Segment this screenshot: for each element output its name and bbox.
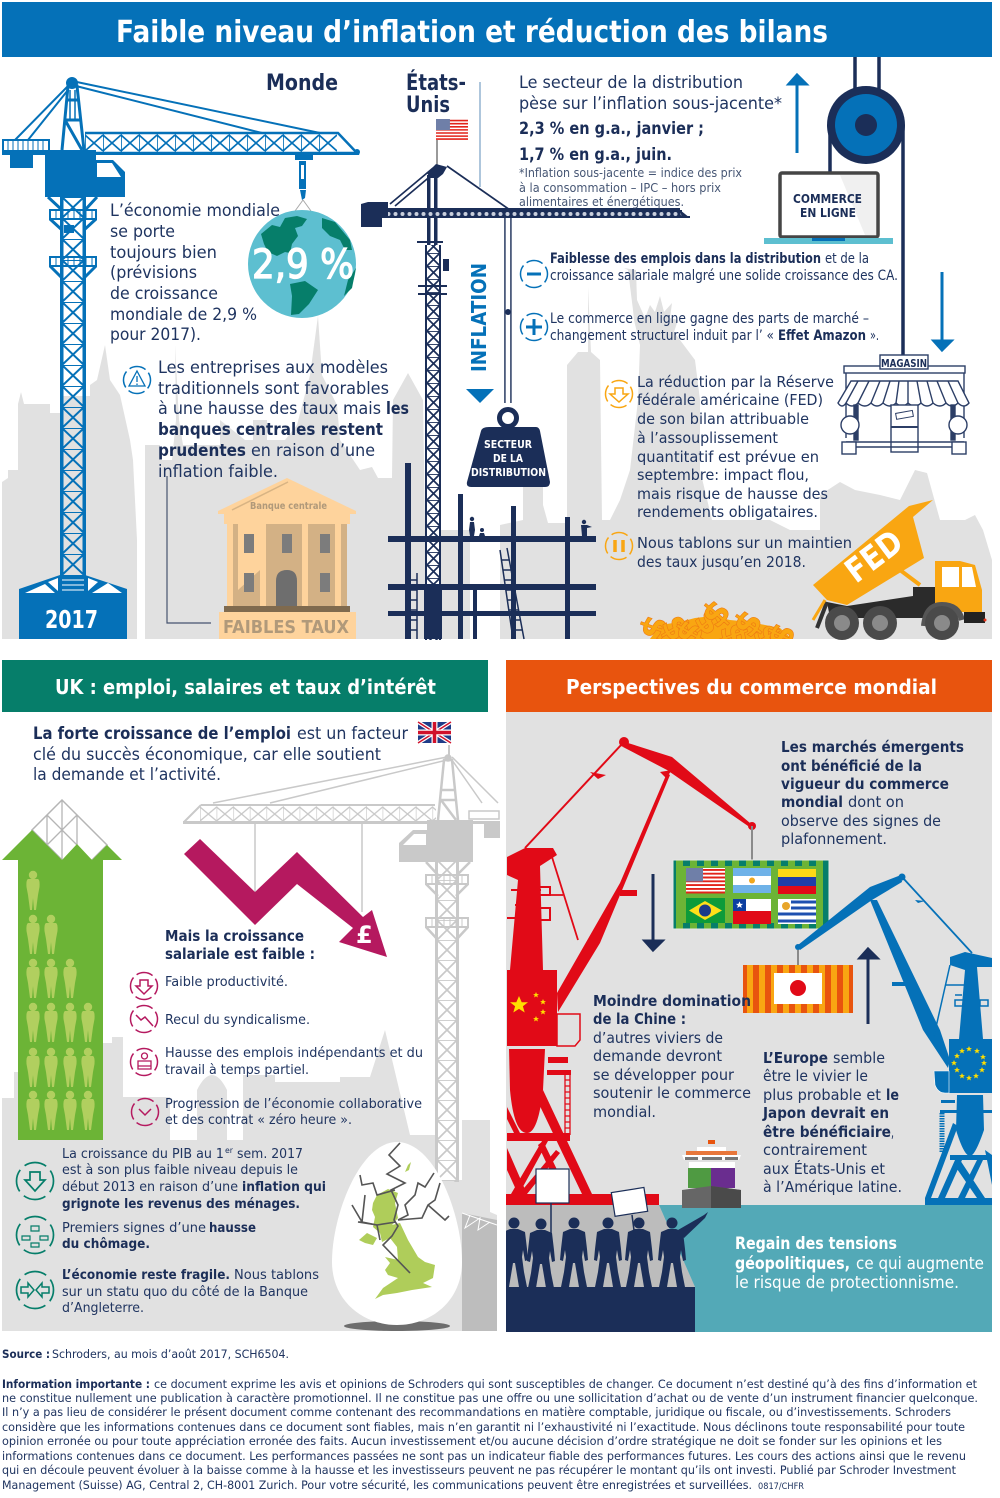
icon: dollar pile: $ bbox=[632, 610, 678, 646]
text: world economy: toujours bien bbox=[110, 243, 217, 263]
text: Europe and Japan: le bbox=[886, 1086, 899, 1104]
text: emerging markets bbox=[781, 738, 964, 848]
text: Europe and Japan: être bénéficiaire bbox=[763, 1123, 891, 1141]
list: UK outlook: est à son plus faible niveau depuis le bbox=[62, 1162, 298, 1178]
flag: Brazil bbox=[686, 898, 725, 923]
text: strong job growth: est un facteur bbox=[297, 724, 408, 744]
arrow: falling wages with pound bbox=[184, 839, 387, 957]
legal information: ce document exprime les avis et opinions de Schroders qui sont susceptibles de changer. Ce document n’est destiné qu’à des fins d’information et bbox=[154, 1377, 977, 1391]
list: UK outlook: Premiers signes d’une bbox=[62, 1220, 206, 1236]
crane hook bbox=[295, 155, 313, 211]
icon: dollar pile: $ bbox=[693, 592, 739, 636]
legal information: 0817/CHFR bbox=[758, 1482, 805, 1492]
icon: store magasin bbox=[838, 355, 969, 454]
icon: dollar pile: $ bbox=[686, 600, 731, 643]
list: UK outlook: sem. 2017 bbox=[237, 1146, 303, 1162]
list: UK outlook: hausse bbox=[209, 1220, 256, 1236]
crane tower bbox=[507, 848, 580, 1133]
text: Europe and Japan: Japon devrait en bbox=[762, 1104, 889, 1122]
text: Europe and Japan: L’Europe bbox=[763, 1049, 828, 1067]
text: FED balance sheet: de son bilan attribuable bbox=[637, 410, 809, 428]
flag pole bbox=[436, 140, 438, 166]
panel: geopolitical tensions: Regain des tensions bbox=[735, 1234, 897, 1253]
list: UK outlook: sur un statu quo du côté de la Banque bbox=[62, 1284, 308, 1300]
crane tower bbox=[426, 862, 470, 1182]
arrow: online commerce up bbox=[789, 75, 806, 153]
text: wage growth heading bbox=[165, 927, 315, 963]
title band: Faible niveau d’inflation et réduction des bilans bbox=[116, 15, 828, 50]
text: FED balance sheet bbox=[637, 373, 834, 521]
text: emerging markets: vigueur du commerce bbox=[781, 775, 949, 793]
text: China: soutenir le commerce bbox=[593, 1084, 751, 1102]
crane counterweight bbox=[361, 202, 388, 227]
legal information: considère que les informations contenues dans ce document sont fiables, mais n’en garantit ni l’exhaustivité ni l’exactitude. Nous déclinons toute responsabilité pour toute bbox=[2, 1420, 965, 1434]
text: FED balance sheet: mais risque de hausse des bbox=[637, 485, 828, 503]
source: Source : bbox=[2, 1347, 50, 1361]
text: FED balance sheet: septembre: impact flou, bbox=[637, 466, 809, 484]
text: wage growth heading: Mais la croissance bbox=[165, 927, 304, 945]
icon: US flag bbox=[436, 119, 468, 140]
list: wage growth factors: Recul du syndicalisme. bbox=[165, 1012, 310, 1028]
text: Europe and Japan: semble bbox=[833, 1049, 885, 1067]
legal information: informations contenues dans ce document. Les performances passées ne sont pas un indicateur fiable des performances futures. Les cours des actions ainsi que le revenu bbox=[2, 1449, 966, 1463]
arrow: store down bbox=[934, 272, 951, 350]
text: emerging markets: plafonnement. bbox=[781, 830, 887, 848]
divider bbox=[479, 82, 481, 187]
icon: dollar pile: $ bbox=[711, 617, 756, 653]
connector line to bank bbox=[167, 476, 211, 623]
legal information: qui en découle peuvent évoluer à la baisse comme à la hausse et les investisseurs peuvent ne pas récupérer le montant qu’ils ont investi. Publié par Schroder Investment bbox=[2, 1463, 956, 1477]
icon: central bank bbox=[218, 478, 356, 639]
list: UK outlook: Nous tablons bbox=[234, 1267, 319, 1283]
list: wage growth factors bbox=[130, 972, 423, 1128]
text: world economy bbox=[110, 201, 280, 345]
text: Europe and Japan: plus probable et bbox=[763, 1086, 881, 1104]
arrow: Japan up bbox=[860, 949, 877, 1024]
egg cracks bbox=[352, 1143, 449, 1273]
icon: dollar pile: $ bbox=[725, 603, 771, 645]
list: UK outlook: d’Angleterre. bbox=[62, 1300, 144, 1316]
crane hanging lines bbox=[255, 823, 362, 912]
crane base 2017 bbox=[19, 575, 127, 639]
list: UK outlook: er bbox=[225, 1146, 234, 1155]
truck chassis bbox=[813, 570, 945, 628]
text: central banks: prudentes bbox=[158, 441, 246, 461]
text: China: se développer pour bbox=[593, 1066, 735, 1084]
crane mast bbox=[417, 164, 449, 640]
text: FED balance sheet: fédérale américaine (FED) bbox=[637, 391, 823, 409]
crane boom bbox=[795, 874, 972, 1068]
weight: secteur de la distribution: DISTRIBUTION bbox=[471, 467, 546, 479]
icon: laptop commerce en ligne: EN LIGNE bbox=[800, 206, 856, 220]
icon: minus bbox=[520, 260, 548, 288]
icon: Japan container bbox=[743, 950, 853, 1013]
icon: pause orange bbox=[606, 532, 632, 560]
legal information: Management (Suisse) AG, Central 2, CH-8001 Zurich. Pour votre sécurité, les communications peuvent être enregistrées et surveillées. bbox=[2, 1478, 752, 1492]
text: FED balance sheet: La réduction par la Réserve bbox=[637, 373, 834, 391]
text: retail sector inflation: 1,7 % en g.a., juin. bbox=[519, 145, 672, 165]
text: retail sector inflation: Le secteur de la distribution bbox=[519, 73, 743, 93]
arrow: falling wages with pound: £ bbox=[356, 921, 373, 949]
crane cabin bbox=[399, 811, 500, 862]
text: Europe and Japan: à l’Amérique latine. bbox=[763, 1178, 902, 1196]
icon: cargo ship bbox=[682, 1140, 741, 1208]
text: world economy: se porte bbox=[110, 222, 175, 242]
legal information: ne constitue nullement une publication à caractère promotionnel. Il ne constitue pas une offre ou une sollicitation d’achat ou de vente d’un instrument financier quelconque. bbox=[2, 1391, 978, 1405]
text: emerging markets: dont on bbox=[848, 793, 904, 811]
icon: protesters with placards bbox=[500, 1169, 708, 1288]
icon: dollar pile: $ bbox=[744, 617, 790, 657]
legal information bbox=[2, 1377, 978, 1492]
weight: secteur de la distribution: SECTEUR bbox=[484, 439, 532, 451]
text: rates on hold: Nous tablons sur un maintien bbox=[637, 534, 852, 552]
text: emerging markets: Les marchés émergents bbox=[781, 738, 964, 756]
list: UK outlook: grignote les revenus des ménages. bbox=[62, 1196, 300, 1212]
text: Amazon effect: ». bbox=[870, 328, 879, 344]
list: wage growth factors: Progression de l’économie collaborative bbox=[165, 1096, 422, 1112]
panel: world and US skyline background bbox=[2, 268, 992, 639]
header: UK bbox=[2, 660, 488, 712]
crane cables bbox=[390, 166, 510, 210]
header: commerce mondial bbox=[506, 660, 992, 712]
UK map bbox=[359, 1162, 435, 1299]
scaffolding bbox=[388, 463, 596, 639]
icon: zero hour contracts bbox=[132, 1098, 158, 1126]
crane mast and cables bbox=[15, 78, 320, 150]
icon: plus bbox=[520, 314, 548, 340]
text: wage growth heading: salariale est faible : bbox=[165, 945, 315, 963]
source: Schroders, au mois d’août 2017, SCH6504. bbox=[52, 1347, 289, 1361]
text: world economy: de croissance bbox=[110, 284, 218, 304]
text: Amazon effect: changement structurel induit par l’ « bbox=[550, 328, 774, 344]
flag: Chile bbox=[733, 899, 771, 924]
panel: US crane bbox=[361, 140, 690, 640]
header: commerce mondial: Perspectives du commerce mondial bbox=[566, 675, 937, 699]
crane boom bbox=[525, 737, 756, 1012]
text: strong job growth: clé du succès économique, car elle soutient bbox=[33, 745, 381, 765]
text: China bbox=[593, 992, 751, 1121]
text: retail sector inflation: à la consommation – IPC – hors prix bbox=[519, 181, 721, 195]
text: central banks: banques centrales restent bbox=[158, 420, 383, 440]
icon: globe 2,9 % bbox=[248, 210, 356, 318]
text: China: de la Chine : bbox=[593, 1010, 686, 1028]
arrow: emerging markets down bbox=[645, 874, 662, 950]
list: UK outlook: L’économie reste fragile. bbox=[62, 1267, 230, 1283]
heading: États-Unis bbox=[406, 70, 466, 118]
text: strong job growth: la demande et l’activité. bbox=[33, 765, 221, 785]
text: strong job growth bbox=[33, 724, 408, 785]
text: rates on hold: des taux jusqu’en 2018. bbox=[637, 553, 806, 571]
icon: central bank: Banque centrale bbox=[250, 501, 327, 512]
text: emerging markets: ont bénéficié de la bbox=[781, 757, 922, 775]
crane jib bbox=[2, 133, 360, 155]
text: FED balance sheet: à l’assouplissement bbox=[637, 429, 778, 447]
icon: red crane China bbox=[506, 737, 756, 1205]
crane mast and cables bbox=[213, 745, 498, 820]
icon: low productivity bbox=[130, 972, 158, 1000]
text: Europe and Japan: aux États-Unis et bbox=[763, 1159, 885, 1178]
crane legs and base bbox=[925, 1100, 992, 1205]
arrow: green employment arrow with people bbox=[2, 800, 122, 1140]
flag: Venezuela bbox=[778, 869, 816, 894]
legal information: Information importante : bbox=[2, 1377, 150, 1391]
text: retail sector inflation: 2,3 % en g.a., janvier ; bbox=[519, 119, 704, 139]
text: emerging markets: observe des signes de bbox=[781, 812, 941, 830]
text: Amazon effect: Effet Amazon bbox=[778, 328, 866, 344]
icon: laptop commerce en ligne: COMMERCE bbox=[793, 192, 862, 206]
icon: FED dump truck bbox=[813, 500, 986, 640]
icon: warning bbox=[124, 366, 150, 394]
icon: globe 2,9 %: 2,9 % bbox=[252, 242, 354, 288]
crane legs and base bbox=[506, 1057, 659, 1205]
text: retail jobs: et de la bbox=[825, 251, 869, 267]
crane counterweight bbox=[3, 140, 49, 168]
crane jib bbox=[183, 805, 500, 824]
list: wage growth factors: Faible productivité. bbox=[165, 974, 288, 990]
text: China: Moindre domination bbox=[593, 992, 751, 1010]
text: strong job growth: La forte croissance de l’emploi bbox=[33, 724, 291, 744]
crane base bbox=[462, 1213, 497, 1331]
text: central banks: à une hausse des taux mais bbox=[158, 399, 381, 419]
icon: FED dump truck: FED bbox=[837, 522, 910, 590]
panel: geopolitical tensions: le risque de protectionnisme. bbox=[735, 1273, 959, 1292]
icon: UK flag bbox=[418, 722, 451, 743]
flag: USA bbox=[686, 868, 725, 893]
heading: Monde: Monde bbox=[266, 71, 338, 96]
text: retail jobs: croissance salariale malgré une solide croissance des CA. bbox=[550, 268, 898, 284]
text: Europe and Japan: être le vivier le bbox=[763, 1067, 868, 1085]
hoist ropes bbox=[504, 218, 512, 403]
text: China: demande devront bbox=[593, 1047, 722, 1065]
text: retail sector inflation: alimentaires et énergétiques. bbox=[519, 195, 684, 209]
icon: down arrow orange bbox=[606, 380, 632, 408]
text: Amazon effect bbox=[550, 311, 879, 344]
list: UK outlook: début 2013 en raison d’une bbox=[62, 1179, 238, 1195]
icon: unemployment bbox=[16, 1216, 54, 1254]
icon: EU stars bbox=[951, 1046, 987, 1080]
text: world economy: pour 2017). bbox=[110, 325, 201, 345]
text: central banks: traditionnels sont favorables bbox=[158, 379, 389, 399]
weight: secteur de la distribution: DE LA bbox=[493, 453, 524, 465]
icon: dollar pile bbox=[640, 601, 794, 639]
text: central banks bbox=[158, 358, 409, 482]
flag: Uruguay bbox=[778, 899, 816, 924]
panel: geopolitical tensions: géopolitiques, bbox=[735, 1254, 850, 1273]
icon: dollar pile: $ bbox=[667, 613, 713, 653]
text: rates on hold bbox=[637, 534, 852, 571]
icon: store magasin: MAGASIN bbox=[881, 358, 927, 370]
icon: laptop commerce en ligne bbox=[764, 173, 893, 244]
icon: central bank: FAIBLES TAUX bbox=[223, 617, 349, 638]
icon: container of emerging market flags bbox=[673, 826, 829, 929]
icon: China flag stars bbox=[510, 992, 546, 1022]
list: wage growth factors: et des contrat « zéro heure ». bbox=[165, 1112, 352, 1128]
text: retail jobs: Faiblesse des emplois dans la distribution bbox=[550, 251, 821, 267]
list: UK outlook: La croissance du PIB au 1 bbox=[62, 1146, 224, 1162]
legal information: opinion erronée ou pour toute appréciation erronée des faits. Aucun investissement et/ou aucune décision d’ordre stratégique ne doit se fonder sur les opinions et les bbox=[2, 1434, 942, 1448]
text: central banks: les bbox=[386, 399, 409, 419]
truck dump body bbox=[813, 500, 933, 605]
heading: États-Unis: États- bbox=[406, 70, 466, 96]
crane cabin bbox=[45, 150, 125, 197]
panel: world construction crane bbox=[2, 78, 360, 639]
icon: status quo bbox=[16, 1272, 54, 1308]
panel: geopolitical tensions: ce qui augmente bbox=[856, 1254, 984, 1273]
crane tower bbox=[934, 952, 992, 1156]
crane jib bbox=[385, 208, 690, 218]
text: China: d’autres viviers de bbox=[593, 1029, 723, 1047]
text: retail jobs bbox=[550, 251, 898, 284]
crane tower bbox=[48, 197, 97, 592]
text: Europe and Japan: , bbox=[891, 1123, 894, 1141]
truck cab bbox=[924, 561, 986, 626]
heading: États-Unis: Unis bbox=[406, 93, 450, 118]
text: central banks: en raison d’une bbox=[251, 441, 375, 461]
label: INFLATION with arrow bbox=[466, 263, 494, 403]
icon: blue crane Europe bbox=[795, 874, 992, 1205]
crane base 2017: 2017 bbox=[45, 605, 98, 634]
icon: self-employed bbox=[130, 1048, 158, 1076]
text: world economy: (prévisions bbox=[110, 263, 197, 283]
text: FED balance sheet: quantitatif est prévue en bbox=[637, 448, 819, 466]
text: central banks: Les entreprises aux modèles bbox=[158, 358, 388, 378]
panel: UK skyline background bbox=[2, 1030, 497, 1331]
truck wheels bbox=[825, 606, 959, 640]
text: Amazon effect: Le commerce en ligne gagne des parts de marché – bbox=[550, 311, 869, 327]
list: UK outlook: inflation qui bbox=[242, 1179, 326, 1195]
text: world economy: mondiale de 2,9 % bbox=[110, 305, 257, 325]
list: wage growth factors: Hausse des emplois indépendants et du bbox=[165, 1045, 423, 1061]
text: FED balance sheet: rendements obligataires. bbox=[637, 503, 818, 521]
list: UK outlook: du chômage. bbox=[62, 1236, 150, 1252]
flag: Argentina bbox=[733, 868, 771, 893]
panel: UK grey crane bbox=[183, 745, 500, 1331]
icon: cracked egg with UK map bbox=[332, 1142, 462, 1331]
text: Europe and Japan: contrairement bbox=[763, 1141, 867, 1159]
text: China: mondial. bbox=[593, 1103, 656, 1121]
text: retail sector inflation bbox=[519, 73, 782, 209]
text: central banks: inflation faible. bbox=[158, 462, 278, 482]
panel: world trade background bbox=[506, 712, 992, 1332]
icon: GDP down bbox=[16, 1162, 54, 1200]
panel: geopolitical tensions bbox=[506, 1205, 992, 1332]
icon: pulley bbox=[827, 57, 905, 365]
text: world economy: L’économie mondiale bbox=[110, 201, 280, 221]
text: retail sector inflation: *Inflation sous-jacente = indice des prix bbox=[519, 166, 742, 180]
weight: secteur de la distribution bbox=[467, 410, 550, 487]
icon: dollar pile: $ bbox=[652, 608, 699, 648]
legal information: Il n’y a pas lieu de considérer le présent document comme contenant des recommandations en matière comptable, juridique ou fiscale, ou d’investissements. Schroders bbox=[2, 1405, 951, 1419]
list: wage growth factors: travail à temps partiel. bbox=[165, 1062, 309, 1078]
header: UK: UK : emploi, salaires et taux d’intérêt bbox=[55, 675, 436, 699]
title band bbox=[2, 2, 992, 57]
text: retail sector inflation: pèse sur l’inflation sous-jacente* bbox=[519, 94, 782, 114]
text: emerging markets: mondial bbox=[781, 793, 843, 811]
label: INFLATION with arrow: INFLATION bbox=[467, 263, 491, 372]
list: UK outlook bbox=[16, 1146, 326, 1316]
text: Europe and Japan bbox=[762, 1049, 902, 1196]
icon: dollar pile: $ bbox=[759, 617, 805, 655]
icon: union decline bbox=[130, 1006, 158, 1032]
